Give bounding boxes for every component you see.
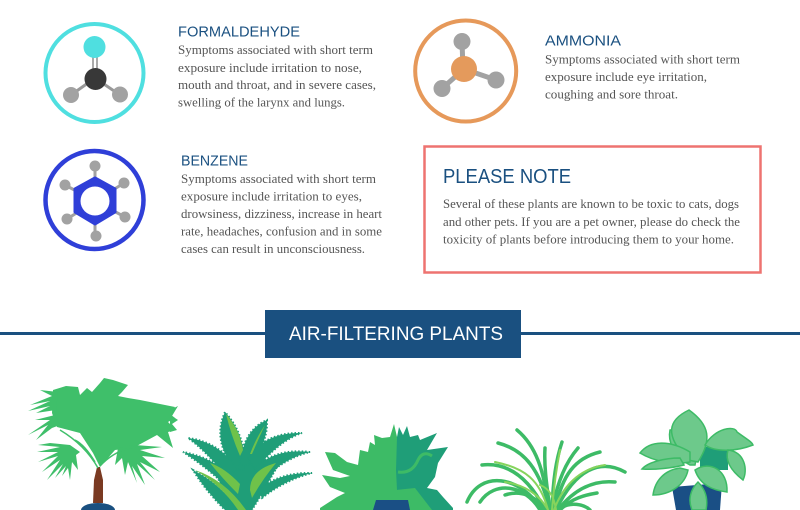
- text: pet warning: [443, 197, 740, 246]
- panel: formaldehyde: [46, 24, 376, 122]
- text: ammonia symptoms: exposure include eye irritation,: [545, 70, 707, 84]
- section banner: air-filtering plants: [265, 310, 521, 358]
- text: ammonia symptoms: coughing and sore throat.: [545, 88, 678, 102]
- heading: ammonia: AMMONIA: [545, 32, 621, 50]
- plant: dieffenbachia: [640, 410, 753, 510]
- text: benzene symptoms: Symptoms associated with short term: [181, 172, 376, 186]
- text: benzene symptoms: drowsiness, dizziness, increase in heart: [181, 207, 383, 221]
- icon: formaldehyde molecule: [46, 24, 144, 122]
- plant: palm: [28, 378, 178, 510]
- text: benzene symptoms: rate, headaches, confusion and in some: [181, 224, 382, 238]
- panel: benzene: [46, 151, 383, 256]
- text: benzene symptoms: [181, 172, 383, 256]
- text: formaldehyde symptoms: mouth and throat, and in severe cases,: [178, 78, 376, 92]
- plant: boston fern: [320, 424, 453, 510]
- heading: formaldehyde: FORMALDEHYDE: [178, 24, 300, 40]
- plant: spider plant: [467, 430, 625, 510]
- panel: ammonia: [415, 20, 740, 122]
- callout: please note: [424, 146, 760, 272]
- text: pet warning: Several of these plants are known to be toxic to cats, dogs: [443, 197, 739, 211]
- text: pet warning: toxicity of plants before introducing them to your home.: [443, 232, 734, 246]
- text: formaldehyde symptoms: exposure include irritation to nose,: [178, 61, 362, 75]
- heading: benzene: BENZENE: [181, 153, 248, 170]
- text: ammonia symptoms: Symptoms associated with short term: [545, 52, 740, 66]
- text: formaldehyde symptoms: [178, 43, 376, 110]
- text: ammonia symptoms: [545, 52, 740, 102]
- text: formaldehyde symptoms: swelling of the larynx and lungs.: [178, 96, 345, 110]
- plant: broad teal fern: [183, 412, 312, 510]
- section banner: air-filtering plants: AIR-FILTERING PLANTS: [289, 324, 503, 345]
- icon: ammonia molecule: [415, 20, 516, 122]
- text: benzene symptoms: exposure include irritation to eyes,: [181, 190, 362, 204]
- text: pet warning: and other pets. If you are a pet owner, please do check the: [443, 215, 740, 229]
- heading: please note: PLEASE NOTE: [443, 166, 571, 188]
- text: formaldehyde symptoms: Symptoms associated with short term: [178, 43, 373, 57]
- text: benzene symptoms: cases can result in unconsciousness.: [181, 242, 365, 256]
- icon: benzene molecule: [46, 151, 144, 249]
